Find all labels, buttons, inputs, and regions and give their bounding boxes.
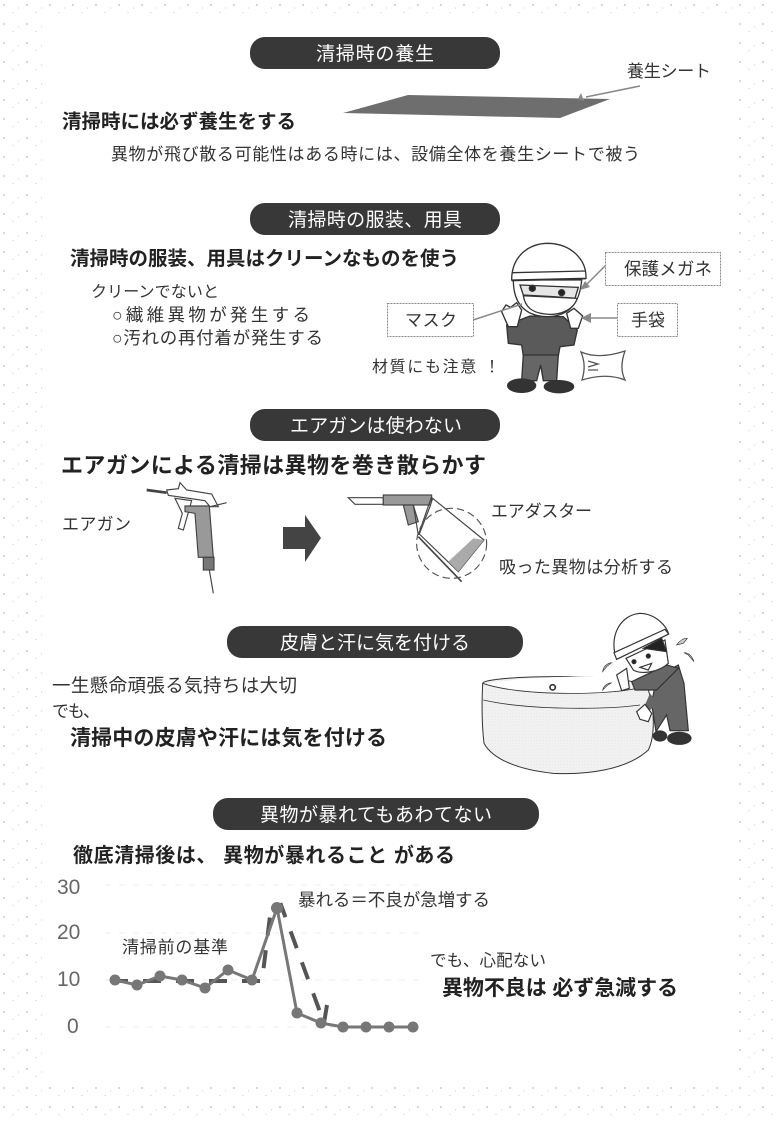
panel: protective covering during cleaning	[62, 37, 711, 164]
heading pill: 異物が暴れてもあわてない	[213, 798, 539, 830]
icon: worker with helmet, goggles, mask and gloves	[502, 243, 586, 393]
heading pill: 清掃時の養生	[250, 37, 500, 69]
callout: マスク: マスク	[405, 311, 457, 330]
line chart: defects before and after cleaning: 30	[57, 876, 80, 899]
line chart: defects before and after cleaning: 0	[67, 1015, 79, 1038]
label: エアダスター: エアダスター	[491, 502, 592, 521]
heading pill: 清掃時の養生: 清掃時の養生	[316, 43, 434, 65]
note: material: 材質にも注意 ！	[372, 358, 500, 376]
heading pill: 皮膚と汗に気を付ける	[227, 626, 523, 658]
callout: 保護メガネ: 保護メガネ	[624, 259, 712, 279]
illustration: worker wiping a tank	[482, 613, 694, 774]
callout: reassurance: でも、心配ない	[430, 951, 546, 970]
body text: 一生懸命頑張る気持ちは大切	[52, 675, 297, 696]
heading pill: 清掃時の服装、用具	[250, 203, 500, 235]
chart label: surge: 暴れる＝不良が急増する	[298, 890, 490, 910]
icon: air gun	[147, 483, 227, 593]
arrow: replace air gun with air duster	[283, 515, 321, 562]
line chart: defects before and after cleaning	[57, 876, 425, 1038]
icon: air duster with dashed circle	[348, 495, 487, 582]
panel: beware of skin and sweat	[52, 613, 694, 774]
subheading: 清掃中の皮膚や汗には気を付ける	[70, 727, 387, 750]
callout: reassurance	[430, 951, 678, 1000]
body text: 異物が飛び散る可能性はある時には、設備全体を養生シートで被う	[111, 145, 640, 164]
callout: 保護メガネ	[580, 252, 720, 290]
label: エアガン: エアガン	[62, 515, 131, 534]
line chart: defects before and after cleaning: 20	[57, 921, 80, 944]
heading pill: エアガンは使わない	[250, 409, 500, 441]
text block: reasons: ○繊維異物が発生する	[112, 305, 310, 325]
heading pill: 清掃時の服装、用具: 清掃時の服装、用具	[288, 209, 462, 231]
icon: covering sheet with pointer	[343, 86, 640, 118]
body text	[52, 675, 297, 721]
panel: do not panic when contaminants surge	[57, 798, 678, 1038]
heading pill: エアガンは使わない: エアガンは使わない	[290, 415, 462, 437]
chart label: baseline: 清掃前の基準	[122, 938, 228, 957]
heading pill: 異物が暴れてもあわてない: 異物が暴れてもあわてない	[260, 804, 492, 826]
text block: reasons	[91, 283, 323, 348]
icon: cleaning cloth	[581, 351, 625, 380]
label: 養生シート: 養生シート	[627, 62, 711, 81]
label: analysis note: 吸った異物は分析する	[499, 558, 673, 577]
subheading: エアガンによる清掃は異物を巻き散らかす	[61, 453, 486, 478]
panel: do not use air guns	[61, 409, 673, 593]
heading pill: 皮膚と汗に気を付ける: 皮膚と汗に気を付ける	[280, 632, 470, 654]
callout: マスク	[388, 304, 522, 336]
subheading: 清掃時の服装、用具はクリーンなものを使う	[70, 247, 459, 270]
panel: clothing and tools during cleaning	[70, 203, 720, 393]
subheading: 清掃時には必ず養生をする	[62, 110, 296, 133]
text block: reasons: ○汚れの再付着が発生する	[112, 328, 323, 348]
callout: 手袋	[581, 304, 678, 336]
callout: 手袋: 手袋	[631, 311, 665, 330]
text block: reasons: クリーンでないと	[91, 283, 219, 301]
subheading: 徹底清掃後は、 異物が暴れること がある	[73, 843, 455, 867]
line chart: defects before and after cleaning: 10	[57, 968, 80, 991]
body text: でも、	[52, 702, 100, 721]
callout: reassurance: 異物不良は 必ず急減する	[442, 976, 678, 1000]
